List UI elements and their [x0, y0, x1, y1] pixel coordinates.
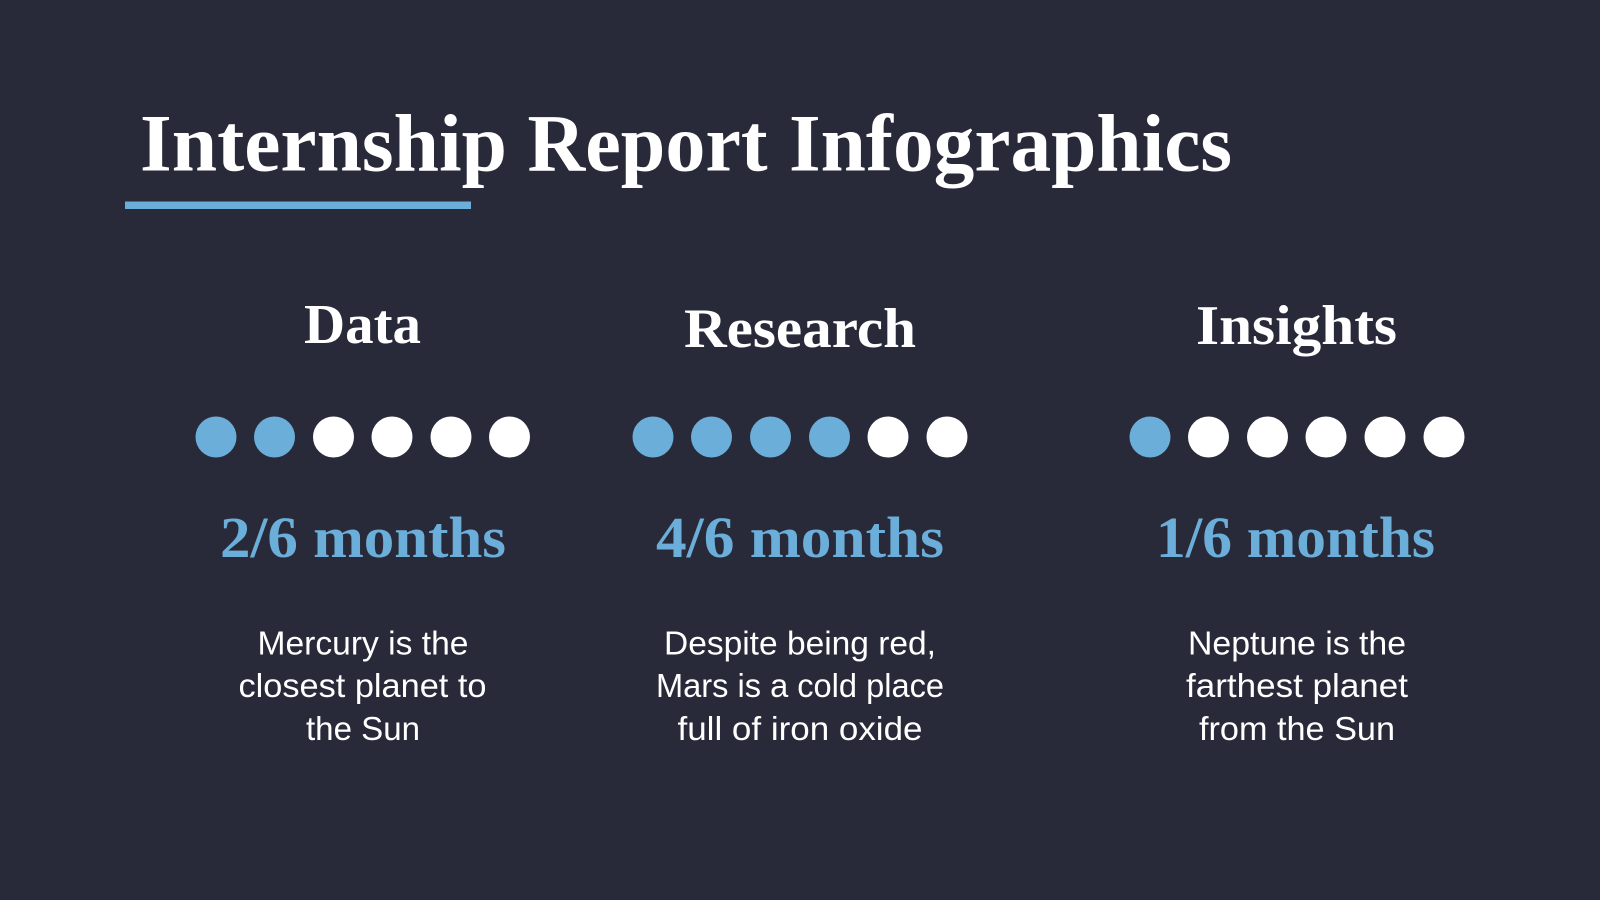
- description: data: the Sun: [306, 710, 420, 747]
- progress dots: 2 of 6: [196, 416, 530, 458]
- description: data: Mercury is the: [258, 624, 468, 662]
- description: research: [656, 624, 944, 747]
- title: [140, 98, 1232, 188]
- duration: research: 4/6 months: [656, 505, 944, 570]
- description: research: Mars is a cold place: [656, 667, 944, 704]
- heading: insights: Insights: [1196, 295, 1397, 357]
- description: data: [238, 624, 486, 747]
- duration: insights: 1/6 months: [1156, 505, 1435, 570]
- description: insights: farthest planet: [1186, 667, 1408, 704]
- description: research: full of iron oxide: [678, 710, 922, 747]
- description: insights: [1186, 624, 1408, 747]
- description: data: closest planet to: [238, 667, 486, 704]
- heading: data: Data: [304, 294, 421, 356]
- title: Infographics: [789, 98, 1232, 188]
- panel: data: [196, 294, 530, 747]
- progress dots: 4 of 6: [632, 416, 968, 458]
- heading: research: Research: [684, 298, 916, 360]
- title: Internship: [140, 98, 507, 188]
- title underline: [125, 202, 471, 209]
- duration: data: 2/6 months: [220, 505, 506, 570]
- progress dots: 1 of 6: [1130, 416, 1464, 458]
- title: Report: [528, 98, 768, 188]
- description: insights: from the Sun: [1199, 710, 1395, 747]
- description: insights: Neptune is the: [1188, 624, 1406, 662]
- description: research: Despite being red,: [664, 624, 936, 662]
- panel: research: [632, 298, 968, 747]
- panel: insights: [1130, 295, 1464, 747]
